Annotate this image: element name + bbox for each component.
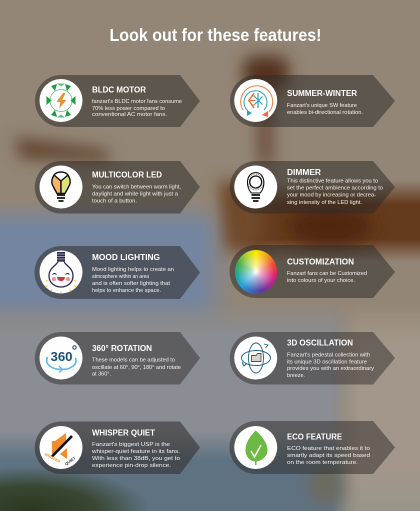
icon: summer-winter bbox=[241, 86, 273, 117]
panel: multicolor LED: You can switch between warm light, bbox=[92, 185, 181, 191]
panel: multicolor LED bbox=[35, 161, 200, 214]
panel: 360 rotation: 360° ROTATION bbox=[92, 344, 152, 353]
panel: eco feature: ECO feature that enables it to bbox=[287, 446, 370, 452]
icon: BLDC motor bbox=[46, 84, 76, 118]
icon: 3D oscillation bbox=[242, 343, 270, 373]
panel: summer-winter: SUMMER-WINTER bbox=[287, 89, 357, 98]
icon: eco leaf bbox=[246, 430, 268, 465]
panel: mood lighting: helps to enhance the space. bbox=[92, 288, 161, 294]
icon: multicolor bulb bbox=[52, 172, 70, 201]
panel: 360 rotation: These models can be adjusted to bbox=[92, 358, 175, 364]
panel: mood lighting: MOOD LIGHTING bbox=[92, 253, 160, 262]
panel: 3D oscillation: 3D OSCILLATION bbox=[287, 338, 353, 347]
panel: multicolor LED: MULTICOLOR LED bbox=[92, 171, 162, 180]
panel: BLDC motor: 70% less power compared to bbox=[92, 106, 165, 112]
panel: summer-winter: enables bi-directional rotation. bbox=[287, 110, 363, 116]
panel: summer-winter: Fanzart's unique SW feature bbox=[287, 103, 357, 109]
icon: 360 rotation: 360 bbox=[50, 350, 73, 364]
panel: customization: Fanzart fans can be Customized bbox=[287, 271, 367, 277]
icon: smiling bulb bbox=[46, 252, 76, 294]
panel: 3D oscillation: breeze. bbox=[287, 373, 305, 379]
panel: 3D oscillation: Fanzart's pedestal collection with bbox=[287, 352, 370, 358]
panel: BLDC motor: BLDC MOTOR bbox=[92, 86, 146, 94]
panel: dimmer: set the perfect ambience according to bbox=[287, 186, 383, 192]
panel: whisper quiet: experience pin-drop silence. bbox=[92, 463, 171, 469]
panel: customization: CUSTOMIZATION bbox=[287, 257, 354, 266]
panel: dimmer: This distinctive feature allows you to bbox=[287, 178, 378, 184]
panel: mood lighting: atmosphere within an area bbox=[92, 274, 149, 280]
panel: whisper quiet: Fanzart's biggest USP is the bbox=[92, 442, 170, 448]
icon: colour wheel bbox=[234, 250, 276, 294]
icon: whisper quiet: QUIET bbox=[64, 456, 77, 466]
panel: eco feature: on the room temperature. bbox=[287, 460, 358, 466]
panel: 3D oscillation: provides you with an extraordinary bbox=[287, 366, 374, 372]
panel: dimmer: sing intensity of the LED light. bbox=[287, 200, 362, 206]
panel: BLDC motor: fanzart's BLDC motor fans consume bbox=[92, 99, 182, 105]
panel: multicolor LED: daylight and white light with just a bbox=[92, 192, 178, 198]
panel: multicolor LED: touch of a button. bbox=[92, 199, 137, 205]
panel: customization: into colours of your choice. bbox=[287, 278, 355, 284]
icon: 360 rotation bbox=[47, 346, 76, 372]
panel: whisper quiet: With less than 38dB, you get to bbox=[92, 456, 180, 462]
panel: mood lighting: Mood lighting helps to create an bbox=[92, 267, 174, 273]
icon: whisper quiet: WHISPER bbox=[44, 452, 61, 464]
panel: summer-winter bbox=[230, 75, 395, 127]
panel: BLDC motor bbox=[35, 75, 200, 127]
panel: BLDC motor: conventional AC motor fans. bbox=[92, 112, 167, 118]
icon: whisper quiet bbox=[44, 433, 77, 466]
panel: eco feature: ECO FEATURE bbox=[287, 432, 343, 441]
panel: mood lighting bbox=[34, 246, 200, 299]
panel: 3D oscillation bbox=[230, 332, 395, 384]
panel: whisper quiet: WHISPER QUIET bbox=[92, 428, 155, 437]
panel: whisper quiet bbox=[35, 422, 200, 474]
panel: 360 rotation: at 360°. bbox=[92, 372, 111, 378]
panel: dimmer bbox=[230, 161, 395, 214]
panel: 360 rotation: oscillate at 60°, 90°, 180° and rotate bbox=[92, 365, 181, 371]
panel: dimmer: DIMMER bbox=[287, 168, 321, 177]
panel: customization bbox=[230, 245, 395, 298]
panel: eco feature: smartly adapt its speed based bbox=[287, 453, 370, 459]
title: Look out for these features! bbox=[110, 25, 322, 45]
panel: eco feature bbox=[230, 421, 395, 474]
panel: 360 rotation bbox=[35, 332, 200, 384]
panel: dimmer: your mood by increasing or decrea- bbox=[287, 192, 376, 198]
panel: mood lighting: and is often softer lighting that bbox=[92, 281, 171, 287]
icon: dimmer bulb bbox=[247, 172, 264, 201]
panel: whisper quiet: whisper-quiet feature in its fans. bbox=[92, 449, 180, 455]
panel: 3D oscillation: its unique 3D oscillation feature bbox=[287, 359, 367, 365]
